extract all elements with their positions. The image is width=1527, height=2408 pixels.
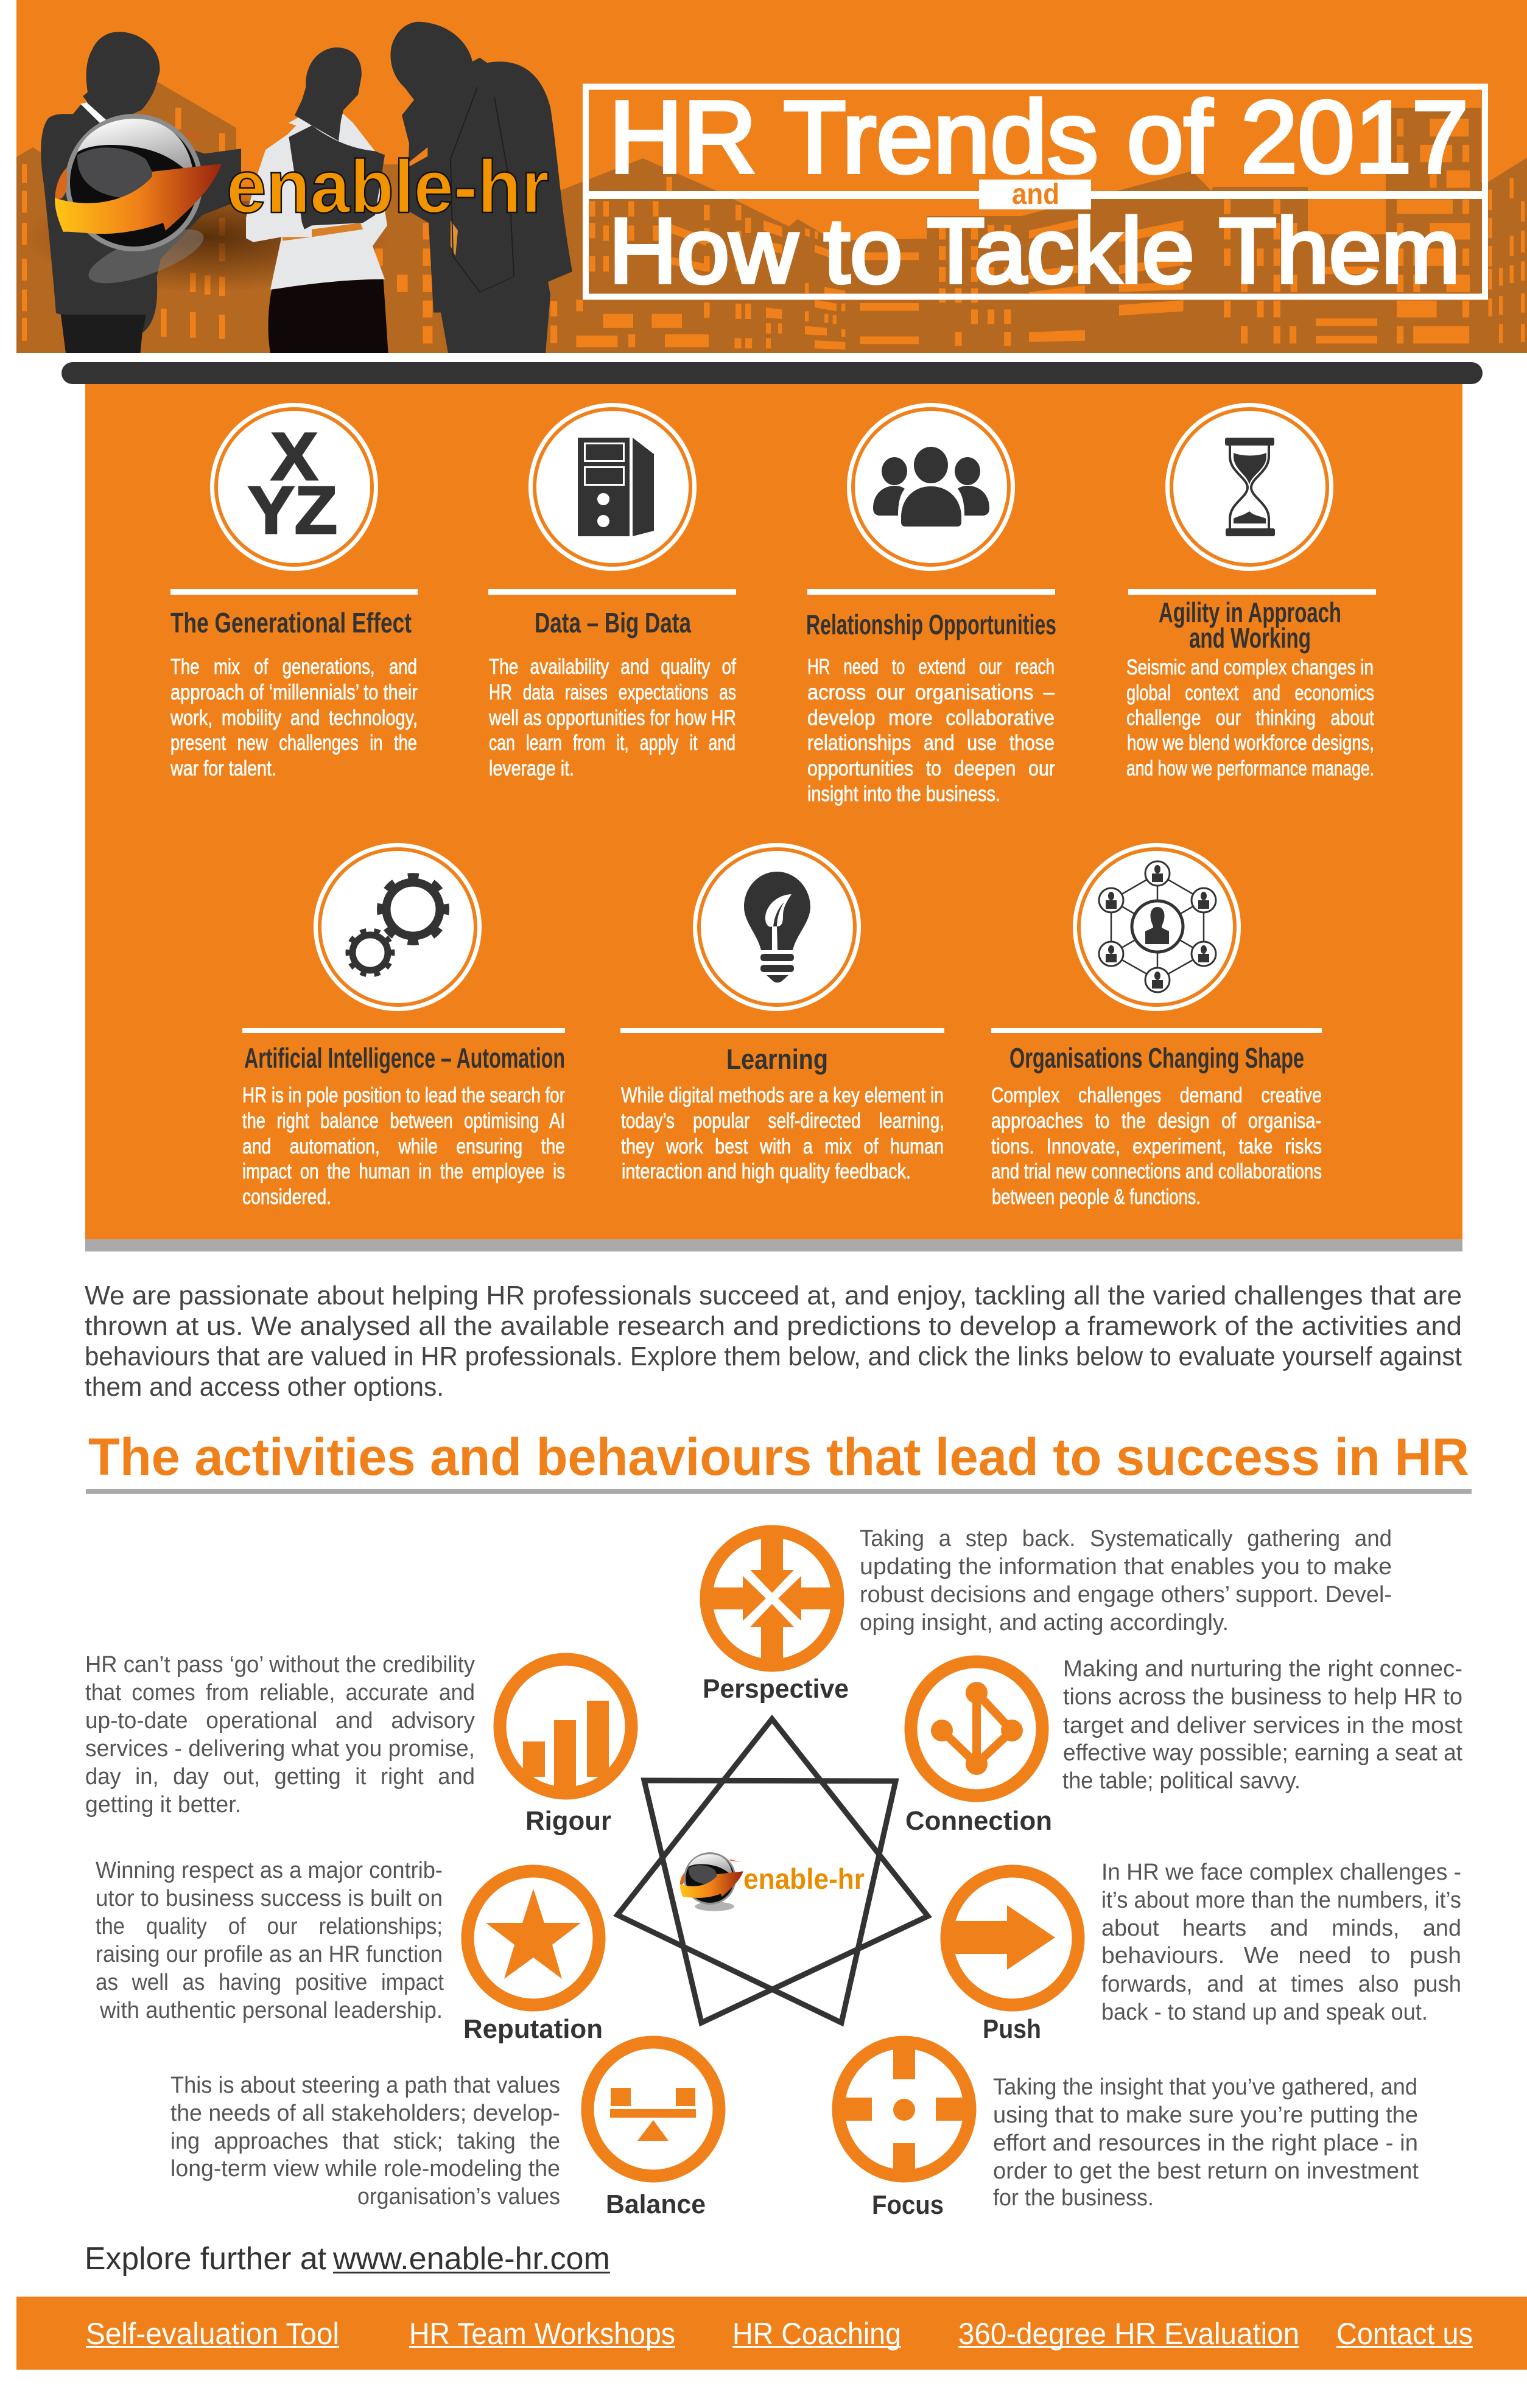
body text: approaches to the design of organisa- <box>991 1109 1321 1133</box>
city skyline background <box>16 81 1527 353</box>
footer link bar <box>16 2297 1527 2370</box>
body text: can learn from it, apply it and <box>489 731 735 755</box>
body text: HR need to extend our reach <box>807 655 1055 679</box>
link: contact us: Contact us <box>1336 2317 1473 2351</box>
description: services - delivering what you promise, <box>85 1736 475 1762</box>
body text: present new challenges in the <box>170 731 417 755</box>
link: 360-degree HR evaluation: 360-degree HR Evaluation <box>958 2317 1299 2351</box>
central star with logo <box>617 1719 928 2023</box>
body text: The availability and quality of <box>489 655 736 679</box>
heading: Organisations Changing Shape <box>1009 1042 1304 1074</box>
body text: they work best with a mix of human <box>621 1135 944 1158</box>
heading: Data – Big Data <box>535 607 691 639</box>
description: as well as having positive impact <box>96 1970 444 1995</box>
description: Winning respect as a major contrib- <box>96 1858 443 1883</box>
description: the quality of our relationships; <box>96 1914 443 1939</box>
behaviour: connection <box>905 1656 1462 1836</box>
description: order to get the best return on investment <box>993 2158 1419 2184</box>
icon: XYZ: YZ <box>248 473 337 548</box>
logo wordmark: enable-hr <box>226 145 549 229</box>
description: it’s about more than the numbers, it’s <box>1101 1888 1461 1913</box>
intro paragraph: behaviours that are valued in HR professionals. Explore them below, and click the links below to evaluate yourself against <box>85 1342 1462 1371</box>
body text: While digital methods are a key element in <box>621 1083 944 1107</box>
description <box>1101 1860 1461 2025</box>
description <box>85 1652 475 1818</box>
icon: light bulb with leaf <box>693 843 861 1011</box>
label: Focus <box>872 2190 944 2220</box>
body text: between people & functions. <box>992 1185 1201 1209</box>
icon: hourglass <box>1165 403 1333 571</box>
description: raising our profile as an HR function <box>96 1942 443 1967</box>
label: Balance <box>606 2189 706 2219</box>
behaviour: rigour <box>85 1652 631 1836</box>
explore further link: www.enable-hr.com <box>332 2241 610 2277</box>
description <box>860 1526 1392 1636</box>
icon: arrows converging <box>702 1528 842 1668</box>
card: organisations changing shape <box>991 843 1322 1209</box>
body text: and how we performance manage. <box>1126 757 1374 780</box>
description: utor to business success is built on <box>96 1886 443 1911</box>
description <box>993 2074 1419 2211</box>
description: with authentic personal leadership. <box>99 1998 443 2023</box>
card: learning <box>620 843 944 1183</box>
title connector word: and <box>1012 178 1059 211</box>
icon: right arrow <box>947 1871 1078 2005</box>
description: robust decisions and engage others’ support. Devel- <box>860 1582 1392 1608</box>
body text: insight into the business. <box>807 782 1000 806</box>
body text: war for talent. <box>170 757 276 780</box>
icon: server tower <box>528 403 697 571</box>
body text: considered. <box>242 1185 331 1209</box>
body text: Seismic and complex changes in <box>1126 656 1374 679</box>
body text: HR data raises expectations as <box>489 681 736 704</box>
description <box>170 2073 560 2210</box>
body text: and automation, while ensuring the <box>242 1135 565 1158</box>
title frame <box>583 86 1488 297</box>
icon: star <box>468 1871 599 2005</box>
heading: Agility in Approach <box>1159 597 1341 628</box>
body text: global context and economics <box>1126 681 1374 705</box>
body text: approach of ‘millennials’ to their <box>170 681 418 704</box>
description: using that to make sure you’re putting the <box>993 2102 1418 2128</box>
description: the table; political savvy. <box>1062 1768 1301 1794</box>
icon: XYZ: X <box>271 419 318 494</box>
shadow glow behind logo <box>40 195 281 289</box>
icon: group of people <box>847 403 1015 571</box>
body text: across our organisations – <box>807 681 1055 704</box>
body text: relationships and use those <box>807 731 1055 755</box>
body text <box>488 655 736 780</box>
body text <box>170 655 418 780</box>
card: data big data <box>488 403 736 780</box>
description: about hearts and minds, and <box>1101 1916 1461 1941</box>
body text <box>1126 656 1374 780</box>
logo: enable-hr globe and arrow <box>55 114 222 294</box>
central logo wordmark: enable-hr <box>743 1863 865 1895</box>
description: getting it better. <box>85 1792 241 1818</box>
title line two: How to Tackle Them <box>609 199 1460 302</box>
label: Rigour <box>525 1806 611 1836</box>
description <box>96 1858 444 2023</box>
intro paragraph: them and access other options. <box>85 1372 444 1402</box>
icon: balance scale <box>588 2042 719 2176</box>
description: for the business. <box>993 2185 1154 2211</box>
body text: Complex challenges demand creative <box>991 1083 1322 1107</box>
header banner <box>16 0 1527 353</box>
icon: XYZ <box>210 403 378 571</box>
description: day in, day out, getting it right and <box>85 1764 475 1790</box>
icon: bar chart <box>500 1659 631 1793</box>
heading: and Working <box>1189 622 1311 654</box>
body text: how we blend workforce designs, <box>1127 731 1374 755</box>
heading <box>1159 597 1341 654</box>
description: tions across the business to help HR to <box>1063 1684 1462 1710</box>
link: HR coaching: HR Coaching <box>732 2317 901 2351</box>
card: relationship opportunities <box>806 403 1056 806</box>
body text: leverage it. <box>489 757 574 780</box>
body text: the right balance between optimising AI <box>242 1109 565 1133</box>
icon: crosshair target <box>838 2042 970 2176</box>
label: Connection <box>905 1806 1052 1836</box>
icon: connected nodes <box>911 1662 1042 1796</box>
icon: people network <box>1073 843 1241 1011</box>
description: back - to stand up and speak out. <box>1101 2000 1428 2025</box>
body text: tions. Innovate, experiment, take risks <box>991 1135 1322 1158</box>
explore further link: Explore further at <box>85 2241 327 2277</box>
behaviour: focus <box>838 2042 1419 2220</box>
link: HR team workshops: HR Team Workshops <box>409 2317 675 2351</box>
body text: The mix of generations, and <box>170 655 417 679</box>
body text: and trial new connections and collaborations <box>991 1160 1322 1183</box>
description: forwards, and at times also push <box>1101 1972 1461 1997</box>
link: self-evaluation tool: Self-evaluation Tool <box>86 2317 339 2351</box>
description: behaviours. We need to push <box>1101 1943 1461 1969</box>
business people silhouettes <box>41 22 572 353</box>
description: the needs of all stakeholders; develop- <box>170 2101 560 2126</box>
body text: develop more collaborative <box>807 706 1055 730</box>
behaviour: balance <box>170 2042 719 2219</box>
description: that comes from reliable, accurate and <box>85 1680 475 1706</box>
label: Reputation <box>463 2014 603 2044</box>
label: Perspective <box>703 1674 849 1704</box>
description: effective way possible; earning a seat at <box>1063 1740 1462 1766</box>
description: In HR we face complex challenges - <box>1101 1860 1461 1885</box>
description: This is about steering a path that values <box>170 2073 560 2098</box>
intro paragraph: thrown at us. We analysed all the available research and predictions to develop a framework of the activities and <box>85 1311 1462 1341</box>
body text: interaction and high quality feedback. <box>622 1160 911 1183</box>
explore further link <box>85 2241 610 2277</box>
icon: gears <box>314 843 482 1011</box>
description: ing approaches that stick; taking the <box>170 2129 560 2154</box>
body text: today’s popular self-directed learning, <box>621 1109 944 1133</box>
description: Taking the insight that you’ve gathered, and <box>993 2074 1417 2100</box>
body text <box>807 655 1055 806</box>
central logo globe <box>680 1852 743 1911</box>
description: target and deliver services in the most <box>1063 1713 1462 1738</box>
body text: work, mobility and technology, <box>170 706 418 730</box>
card: the generational effect <box>170 403 418 780</box>
description: up-to-date operational and advisory <box>85 1708 475 1734</box>
card: agility in approach and working <box>1126 403 1376 780</box>
body text <box>242 1083 565 1209</box>
label: Push <box>983 2014 1041 2044</box>
body text: opportunities to deepen our <box>807 757 1055 780</box>
behaviour: push <box>947 1860 1461 2044</box>
description <box>1062 1656 1462 1794</box>
heading: The Generational Effect <box>170 607 412 639</box>
heading: Learning <box>726 1043 828 1075</box>
title line one: HR Trends of 2017 <box>609 80 1469 194</box>
description: long-term view while role-modeling the <box>170 2156 560 2182</box>
intro paragraph <box>85 1281 1462 1402</box>
description: oping insight, and acting accordingly. <box>860 1610 1229 1636</box>
heading: Relationship Opportunities <box>806 609 1056 640</box>
card: artificial intelligence automation <box>242 843 565 1209</box>
heading: Artificial Intelligence – Automation <box>244 1042 565 1074</box>
description: Making and nurturing the right connec- <box>1063 1656 1462 1682</box>
body text: HR is in pole position to lead the search for <box>242 1083 565 1107</box>
description: updating the information that enables you to make <box>860 1554 1392 1580</box>
body text: challenge our thinking about <box>1126 706 1374 730</box>
panel: seven HR trends <box>61 362 1483 1251</box>
description: effort and resources in the right place - in <box>993 2130 1418 2156</box>
behaviour: perspective <box>702 1526 1392 1704</box>
section heading: The activities and behaviours that lead to success in HR <box>88 1428 1469 1486</box>
body text <box>621 1083 944 1183</box>
description: HR can’t pass ‘go’ without the credibility <box>85 1652 475 1678</box>
intro paragraph: We are passionate about helping HR professionals succeed at, and enjoy, tackling all the varied challenges that are <box>85 1281 1462 1311</box>
body text: well as opportunities for how HR <box>488 706 736 730</box>
body text: impact on the human in the employee is <box>242 1160 565 1183</box>
description: organisation’s values <box>357 2184 560 2210</box>
body text <box>991 1083 1322 1209</box>
description: Taking a step back. Systematically gathering and <box>860 1526 1392 1552</box>
behaviour: reputation <box>96 1858 603 2044</box>
